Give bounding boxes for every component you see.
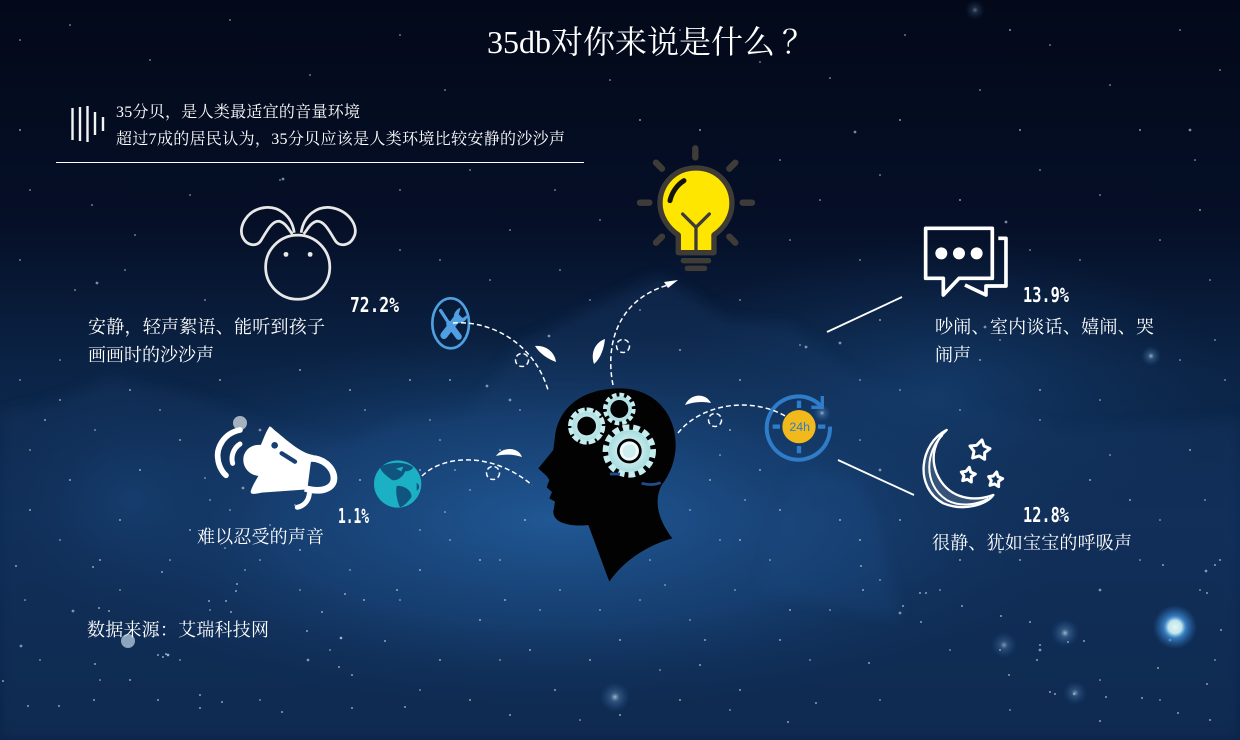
gear top [605, 395, 634, 423]
description: 吵闹、室内谈话、嬉闹、哭 [935, 317, 1154, 337]
description: 闹声 [935, 345, 971, 365]
intro text [116, 103, 565, 148]
gear small left [570, 410, 603, 442]
arrow head [664, 280, 678, 288]
gear large [606, 427, 653, 475]
description: 画画时的沙沙声 [88, 345, 214, 365]
description [935, 317, 1154, 365]
icon: megaphone [218, 427, 334, 507]
connector line [838, 460, 914, 495]
group: noisy talk item [827, 228, 1154, 365]
icon: head with gears [538, 388, 676, 582]
arrow: tools curve [453, 323, 548, 390]
group: unbearable sound item [197, 427, 369, 547]
icon: 24h clock: 24h [789, 420, 810, 434]
percentage 1.1%: 1.1% [338, 504, 369, 528]
description: 安静，轻声絮语、能听到孩子 [88, 317, 325, 337]
percentage 72.2%: 72.2% [350, 293, 399, 317]
connector line [827, 297, 902, 332]
percentage 12.8%: 12.8% [1023, 503, 1069, 527]
intro text: 35分贝，是人类最适宜的音量环境 [116, 103, 360, 121]
intro text: 超过7成的居民认为，35分贝应该是人类环境比较安静的沙沙声 [116, 129, 565, 148]
icon: sound wave bars [72, 106, 103, 142]
title: 35db对你来说是什么？ [487, 24, 814, 60]
arrow: clock curve [678, 405, 787, 433]
description [88, 317, 325, 365]
group: very quiet item [838, 430, 1132, 553]
dashed arrows with leaves [422, 285, 787, 485]
icon: rabbit [241, 207, 355, 299]
group: quiet whisper item [88, 207, 399, 365]
header block: sound wave icon, intro text and rule [56, 103, 584, 162]
icon: light bulb [640, 148, 752, 268]
icon: chat bubbles [926, 228, 1006, 295]
icon: 24h clock [767, 396, 830, 460]
arrow: bulb curve [611, 285, 668, 385]
description: 难以忍受的声音 [197, 527, 324, 547]
leaves [496, 339, 711, 457]
data source: 数据来源：艾瑞科技网 [87, 620, 269, 640]
arrow: globe curve [422, 460, 532, 485]
icon: globe [374, 460, 421, 508]
description: 很静、犹如宝宝的呼吸声 [932, 533, 1132, 553]
icon: moon and stars [924, 430, 1003, 507]
percentage 13.9%: 13.9% [1023, 283, 1069, 307]
icon: wrench and screwdriver [432, 298, 469, 348]
